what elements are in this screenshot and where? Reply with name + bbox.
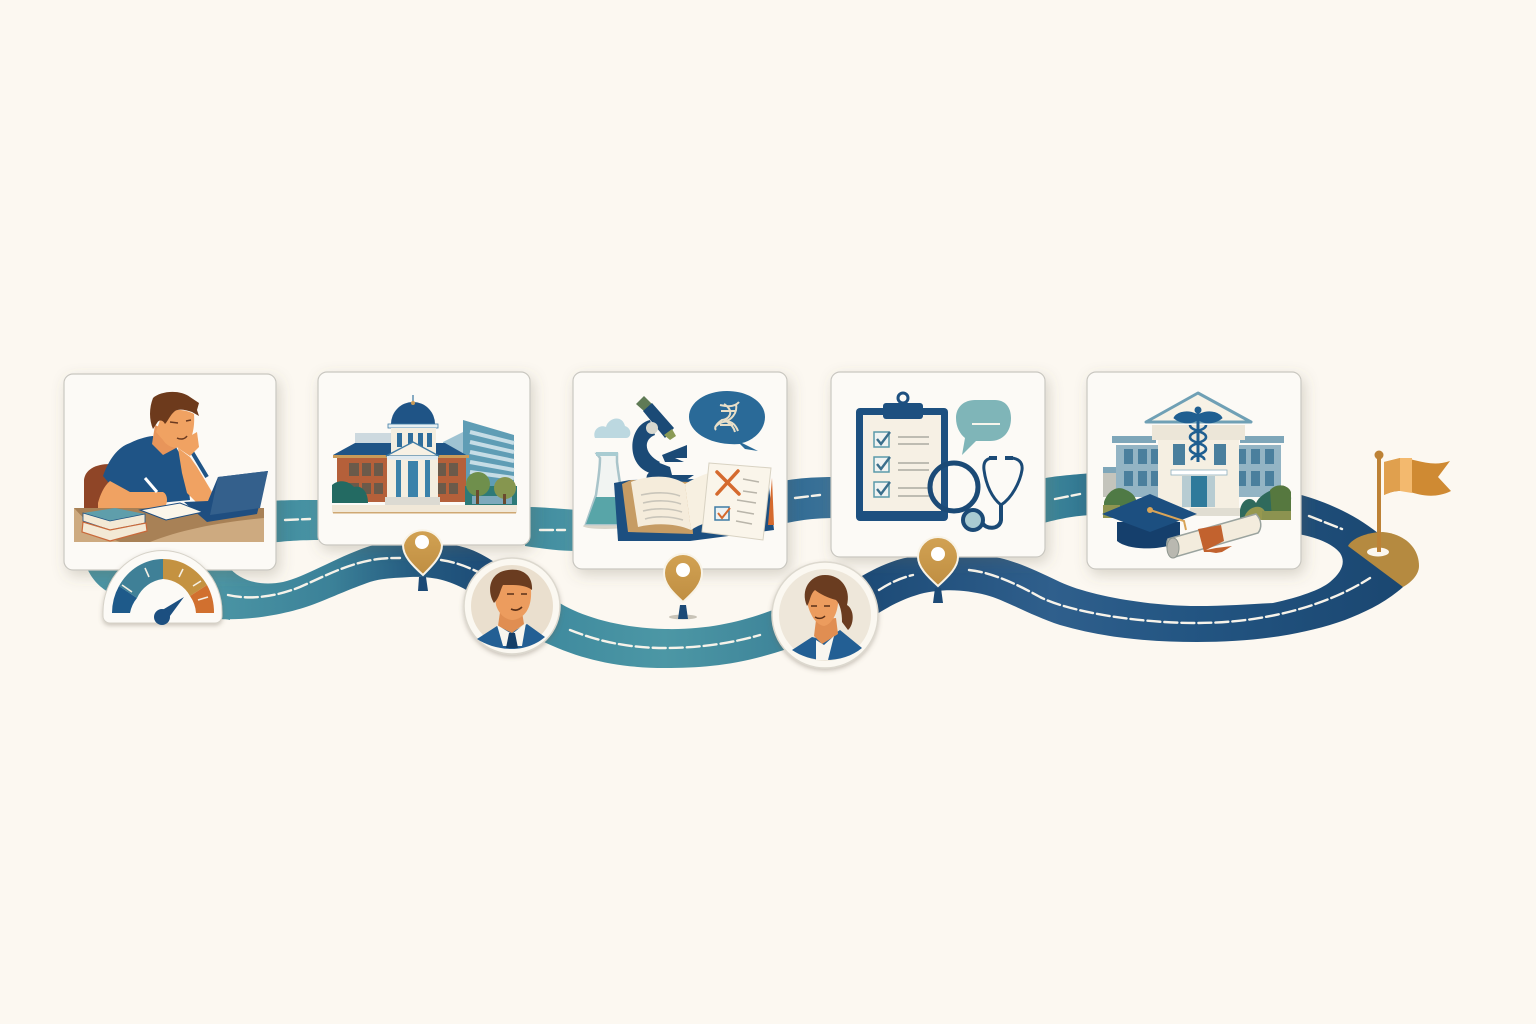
gauge plate [103, 550, 222, 623]
neck [498, 612, 524, 633]
icon: shrubs [1103, 485, 1291, 520]
icon: cloud [594, 419, 630, 438]
portrait background [471, 565, 553, 647]
icon: speed gauge [103, 550, 222, 625]
road: first lower section [218, 542, 500, 619]
flag cloth [1384, 458, 1451, 496]
icon: supporting arm [178, 448, 212, 503]
icon: neck [152, 425, 178, 455]
road: middle teal section [540, 600, 790, 668]
pin base shadow [669, 614, 697, 620]
face [807, 587, 838, 626]
panel: medical school and graduation [1087, 372, 1301, 569]
face [494, 580, 531, 620]
icon: laptop [184, 471, 268, 522]
icon: microscope [632, 396, 694, 484]
card background [573, 372, 787, 569]
shirt and tie [497, 623, 526, 646]
icon: stacked books [82, 508, 147, 541]
suit [477, 624, 545, 649]
icon: speech bubble with DNA [689, 391, 765, 451]
icon: finish flag [1367, 450, 1451, 556]
icon: notebook [140, 503, 203, 520]
icon: forecourt [332, 505, 517, 513]
icon: clipboard [856, 393, 948, 521]
road: start curve under first card [86, 560, 230, 620]
icon: dome [388, 395, 438, 456]
road: connector 2 to 3 [525, 507, 578, 551]
icon: stethoscope [930, 458, 1022, 530]
icon: chair [84, 464, 110, 508]
pin stem [678, 605, 688, 619]
jacket [792, 630, 862, 660]
hair [490, 570, 532, 603]
blouse [816, 636, 834, 660]
icon: side wings [1103, 436, 1284, 497]
road: connector 4 to 5 [1040, 473, 1092, 524]
road: winding route [86, 473, 1419, 668]
eyes and mouth [507, 594, 527, 610]
icon: portico [385, 442, 440, 505]
road: long dark section [855, 494, 1403, 642]
pin head [918, 537, 958, 586]
icon: face [156, 410, 194, 448]
panel: checklist and stethoscope [831, 372, 1045, 557]
gauge needle [154, 597, 184, 625]
icon: hand on chin [178, 432, 199, 456]
road: centre dashes [228, 494, 1370, 648]
card background [831, 372, 1045, 557]
pin stem [933, 588, 943, 603]
portrait frame [464, 558, 560, 654]
icon: pen [145, 478, 157, 492]
icon: flask [583, 452, 627, 529]
pin head [403, 530, 442, 575]
neck [814, 618, 838, 644]
panel: campus buildings [318, 372, 530, 545]
card background [64, 374, 276, 570]
icon: answer sheet with cross and check [702, 463, 774, 540]
icon: student torso [103, 436, 190, 506]
card background [1087, 372, 1301, 569]
pin stem [418, 577, 428, 591]
icon: map pin three [918, 537, 958, 603]
portrait background [779, 569, 871, 661]
road: connector 1 to 2 [270, 500, 322, 543]
panel: science and study [573, 372, 787, 569]
icon: map pin two [664, 554, 702, 620]
eyes and mouth [811, 606, 830, 618]
panel: student studying [64, 374, 276, 570]
road: golden finish area [1348, 532, 1419, 587]
flag pole [1377, 458, 1381, 552]
icon: central block with pediment [1146, 393, 1251, 516]
icon: graduation cap [1102, 494, 1197, 548]
icon: female advisor portrait [772, 562, 878, 668]
flag base [1367, 548, 1389, 556]
icon: checklist items [874, 432, 929, 497]
portrait frame [772, 562, 878, 668]
icon: desk [74, 508, 264, 542]
road: connector 3 to 4 [782, 477, 836, 524]
icon: trees and bushes [332, 472, 517, 505]
icon: back strap of shirt [192, 452, 207, 477]
pin head [664, 554, 702, 602]
icon: caduceus [1174, 406, 1222, 462]
icon: hair [150, 392, 199, 429]
icon: open book [614, 470, 774, 541]
icon: map pin one [403, 530, 442, 591]
card background [318, 372, 530, 545]
icon: speech bubble [956, 400, 1011, 455]
icon: face details [170, 420, 191, 439]
icon: modern tower [443, 420, 514, 490]
hair [805, 575, 853, 630]
gauge arc segments [112, 559, 214, 613]
icon: back block [355, 433, 391, 445]
icon: male advisor portrait [464, 558, 560, 654]
icon: brick wings [333, 443, 469, 502]
icon: writing arm [98, 481, 167, 508]
icon: diploma scroll [1167, 514, 1261, 558]
